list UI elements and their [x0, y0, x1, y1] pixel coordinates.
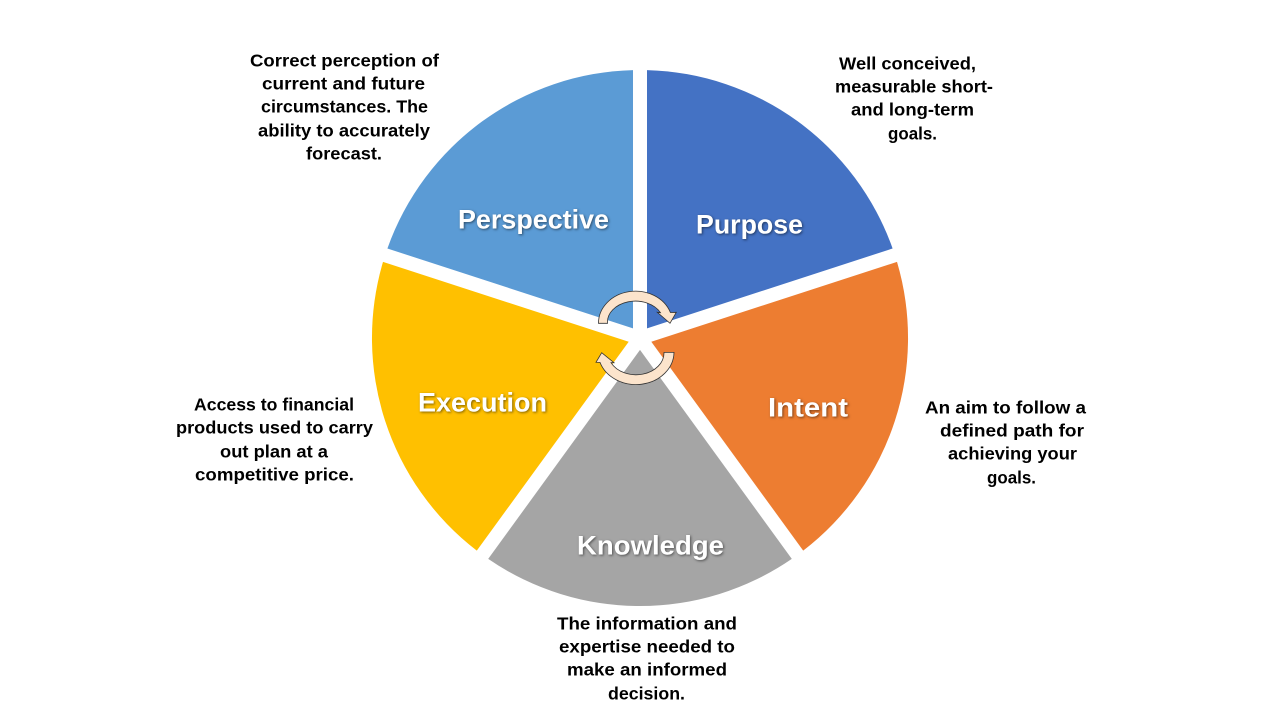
text: Intent description [925, 398, 1086, 488]
text: Intent description: An aim to follow a [925, 398, 1086, 418]
text: Execution description: competitive price. [195, 464, 354, 484]
text: Execution description [176, 394, 373, 484]
wedge: Knowledge [488, 350, 792, 606]
text: Knowledge description: The information and [557, 614, 737, 634]
wedge: Purpose [647, 70, 893, 328]
text: Purpose description [835, 54, 993, 144]
text: Purpose description: and long-term [851, 100, 974, 120]
text: Intent description: defined path for [940, 420, 1084, 440]
text: Purpose description: measurable short- [835, 76, 993, 96]
label: Knowledge: Knowledge [577, 530, 724, 560]
label: Perspective: Perspective [458, 204, 609, 234]
text: Purpose description: Well conceived, [839, 54, 976, 74]
text: Execution description: products used to carry [176, 418, 373, 438]
text: Execution description: out plan at a [220, 442, 328, 462]
text: Perspective description: ability to accurately [258, 120, 430, 140]
label: Execution: Execution [418, 388, 547, 418]
text: Perspective description: circumstances. The [261, 96, 428, 116]
wedge: Perspective [387, 70, 633, 328]
text: Intent description: goals. [987, 468, 1036, 488]
text: Perspective description [250, 50, 439, 164]
text: Knowledge description: make an informed [567, 660, 727, 680]
text: Perspective description: Correct perception of [250, 50, 439, 70]
text: Knowledge description [557, 614, 737, 704]
text: Perspective description: forecast. [306, 144, 382, 164]
text: Intent description: achieving your [948, 444, 1077, 464]
text: Perspective description: current and future [262, 74, 425, 94]
text: Execution description: Access to financial [194, 394, 354, 414]
text: Purpose description: goals. [888, 124, 937, 144]
icon: clockwise arrow, top [598, 291, 676, 323]
label: Intent: Intent [768, 392, 848, 422]
wedge: Intent [651, 262, 908, 551]
text: Knowledge description: decision. [608, 684, 685, 704]
label: Purpose: Purpose [696, 210, 803, 240]
text: Knowledge description: expertise needed to [559, 636, 735, 656]
icon: clockwise arrow, bottom [596, 352, 674, 385]
wedge: Execution [372, 262, 629, 551]
